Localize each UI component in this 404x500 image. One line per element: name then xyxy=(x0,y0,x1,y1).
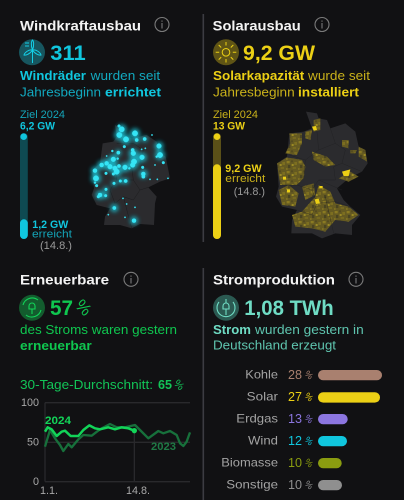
row: Sonstige 10 %: % xyxy=(303,479,315,491)
value: 311: 311 xyxy=(50,42,86,65)
text: Solarkapazität wurde seit Jahresbeginn installiert: Jahresbeginn xyxy=(213,86,295,100)
icon: plug xyxy=(213,295,239,321)
text: Windräder wurden seit Jahresbeginn errichtet: errichtet xyxy=(105,86,162,100)
progress bar: solar xyxy=(213,133,221,239)
row: Erdgas 13 %: % xyxy=(303,413,315,425)
text: Strom wurden gestern in Deutschland erzeugt xyxy=(213,323,364,352)
label: Ziel 2024 13 GW xyxy=(213,109,258,132)
heading: Stromproduktion: Stromproduktion xyxy=(213,271,335,287)
row: Wind 12 % xyxy=(248,434,347,448)
panel: Windkraftausbau xyxy=(19,17,170,252)
text: Solarkapazität wurde seit Jahresbeginn installiert: installiert xyxy=(298,86,360,100)
icon: info xyxy=(155,18,169,32)
text: Solarkapazität wurde seit Jahresbeginn installiert: wurde seit xyxy=(307,69,371,83)
heading: Solarausbau: Solarausbau xyxy=(213,17,301,33)
text: Solarkapazität wurde seit Jahresbeginn installiert xyxy=(213,69,371,100)
marker: 14.8. xyxy=(132,428,137,433)
text: Strom wurden gestern in Deutschland erzeugt: Deutschland erzeugt xyxy=(213,338,337,352)
axis labels: 14.8. xyxy=(126,485,150,497)
icon: info xyxy=(124,272,138,286)
heading: 30-Tage-Durchschnitt: % xyxy=(171,378,187,393)
row: Biomasse 10 %: % xyxy=(303,457,315,469)
progress bar: wind xyxy=(20,133,28,239)
axis labels: 50 xyxy=(27,437,39,449)
text: Windräder wurden seit Jahresbeginn errichtet: wurden seit xyxy=(90,69,161,83)
row: Wind 12 %: % xyxy=(303,435,315,447)
row: Wind 12 %: 12 xyxy=(288,434,302,448)
text: Windräder wurden seit Jahresbeginn errichtet: Jahresbeginn xyxy=(20,86,101,100)
label: 2024: 2024 xyxy=(45,415,72,427)
row: Kohle 28 %: % xyxy=(303,369,315,381)
row: Erdgas 13 %: 13 xyxy=(288,412,302,426)
panel: Stromproduktion xyxy=(213,271,382,492)
text: des Stroms waren gestern erneuerbar xyxy=(20,323,177,353)
row: Sonstige 10 % xyxy=(226,478,342,492)
map: solar districts Germany xyxy=(276,112,368,238)
label: 2023: 2023 xyxy=(151,441,176,453)
icon: info xyxy=(349,272,363,286)
text: Windräder wurden seit Jahresbeginn errichtet xyxy=(20,69,162,100)
label: 1,2 GW erreicht (14.8.): (14.8.) xyxy=(40,240,72,252)
heading: 30-Tage-Durchschnitt xyxy=(20,378,187,393)
heading: 30-Tage-Durchschnitt: 65 xyxy=(158,378,172,392)
value: 1,08 TWh: 1,08 TWh xyxy=(244,297,334,320)
row: Kohle 28 %: 28 xyxy=(288,368,302,382)
row: Erdgas 13 %: Erdgas xyxy=(236,412,278,426)
label: Ziel 2024 6,2 GW: 6,2 GW xyxy=(20,120,56,132)
row: Biomasse 10 %: Biomasse xyxy=(221,456,278,470)
text: des Stroms waren gestern erneuerbar: des Stroms waren gestern xyxy=(20,323,177,337)
label: Ziel 2024 13 GW: Ziel 2024 xyxy=(213,109,258,121)
label: 9,2 GW erreicht (14.8.): erreicht xyxy=(225,173,265,185)
row: Biomasse 10 % xyxy=(221,456,342,470)
heading: 30-Tage-Durchschnitt: 30-Tage-Durchschnitt: xyxy=(20,378,153,392)
row: Kohle 28 % xyxy=(245,368,382,382)
icon: wind turbine xyxy=(19,39,45,65)
value: 57 % xyxy=(50,296,95,320)
axis labels: 0 xyxy=(33,476,39,488)
panel: Erneuerbare xyxy=(19,271,190,497)
axis labels: 100 xyxy=(21,397,39,409)
text: Windräder wurden seit Jahresbeginn errichtet: Windräder xyxy=(20,69,86,83)
label: 1,2 GW erreicht (14.8.) xyxy=(32,219,72,252)
map: wind turbines Germany xyxy=(91,124,170,228)
heading: Erneuerbare: Erneuerbare xyxy=(20,271,109,287)
row: Solar 27 %: % xyxy=(303,391,315,403)
icon: sun xyxy=(213,39,239,65)
row: Solar 27 %: Solar xyxy=(247,390,278,404)
row: Erdgas 13 % xyxy=(236,412,348,426)
heading: Windkraftausbau: Windkraftausbau xyxy=(20,17,141,33)
axis labels: 1.1. xyxy=(40,485,58,497)
label: 9,2 GW erreicht (14.8.) xyxy=(225,163,265,198)
line: 2024 xyxy=(45,425,134,436)
line: 2023 xyxy=(45,424,190,451)
text: des Stroms waren gestern erneuerbar: erneuerbar xyxy=(20,339,92,353)
icon: info xyxy=(315,18,329,32)
axis labels xyxy=(21,397,150,497)
value: 57 %: % xyxy=(71,296,95,320)
row: Solar 27 %: 27 xyxy=(288,390,302,404)
text: Solarkapazität wurde seit Jahresbeginn installiert: Solarkapazität xyxy=(213,69,305,83)
value: 57 %: 57 xyxy=(50,297,73,320)
line chart: renewable share xyxy=(21,397,190,497)
label: Ziel 2024 6,2 GW xyxy=(20,109,65,132)
label: 9,2 GW erreicht (14.8.): 9,2 GW xyxy=(225,163,262,175)
row: Sonstige 10 %: 10 xyxy=(288,478,302,492)
icon: recycling plug xyxy=(19,295,45,321)
bar chart: electricity mix xyxy=(221,368,382,492)
label: 1,2 GW erreicht (14.8.): erreicht xyxy=(32,229,72,241)
panel: Solarausbau xyxy=(213,17,371,239)
row: Biomasse 10 %: 10 xyxy=(288,456,302,470)
label: 1,2 GW erreicht (14.8.): 1,2 GW xyxy=(32,219,69,231)
text: Strom wurden gestern in Deutschland erzeugt: Strom xyxy=(213,323,251,337)
value: 9,2 GW: 9,2 GW xyxy=(243,42,315,65)
label: Ziel 2024 6,2 GW: Ziel 2024 xyxy=(20,109,65,121)
row: Kohle 28 %: Kohle xyxy=(245,368,278,382)
text: Strom wurden gestern in Deutschland erzeugt: wurden gestern in xyxy=(254,323,364,337)
label: 9,2 GW erreicht (14.8.): (14.8.) xyxy=(234,186,265,198)
row: Wind 12 %: Wind xyxy=(248,434,278,448)
row: Solar 27 % xyxy=(247,390,380,404)
row: Sonstige 10 %: Sonstige xyxy=(226,478,278,492)
label: Ziel 2024 13 GW: 13 GW xyxy=(213,120,246,132)
